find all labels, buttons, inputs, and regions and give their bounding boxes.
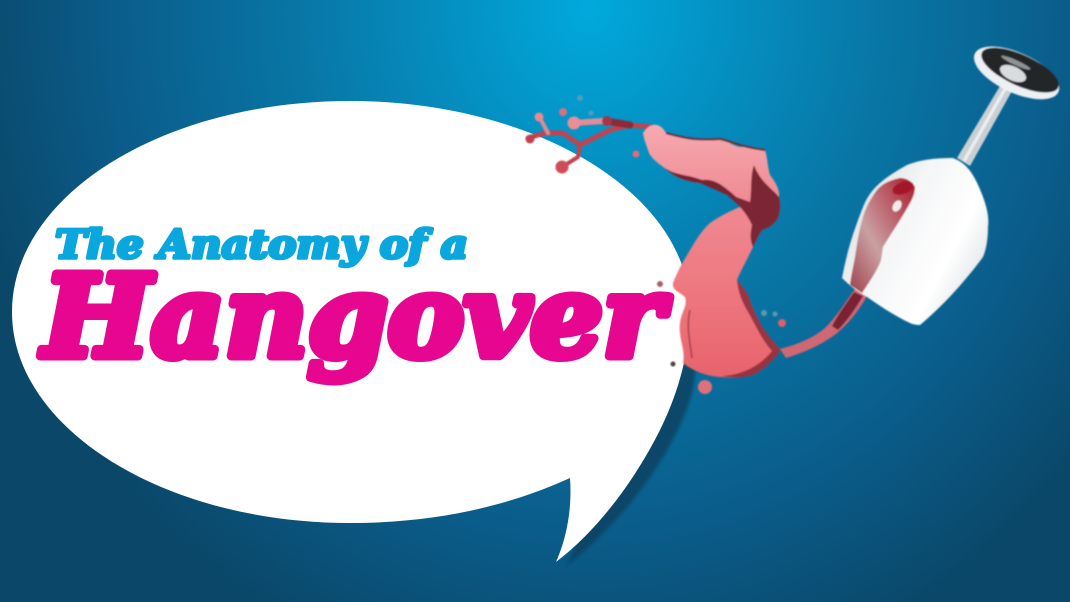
main title: Hangover <box>40 252 670 383</box>
wine dark highlight <box>891 179 915 197</box>
glass stem <box>957 86 1012 166</box>
speech bubble shadow <box>566 250 696 566</box>
wine splash <box>526 95 867 394</box>
lower lobe dark edge <box>722 280 781 377</box>
splash tendrils <box>528 118 653 167</box>
glass foot <box>966 36 1067 110</box>
wine glass <box>842 36 1067 325</box>
glass glint <box>891 199 903 213</box>
wine body <box>643 125 781 378</box>
wine dark top edge <box>666 133 765 150</box>
glass bowl <box>842 158 988 325</box>
wine dark fold <box>728 165 780 247</box>
droplets <box>526 95 786 394</box>
subtitle: The Anatomy of a <box>55 222 468 268</box>
wine underside shade <box>660 164 742 202</box>
speech bubble <box>12 101 690 562</box>
wine in glass <box>850 178 915 293</box>
pouring stream <box>780 287 867 358</box>
left edge shade <box>688 310 692 358</box>
